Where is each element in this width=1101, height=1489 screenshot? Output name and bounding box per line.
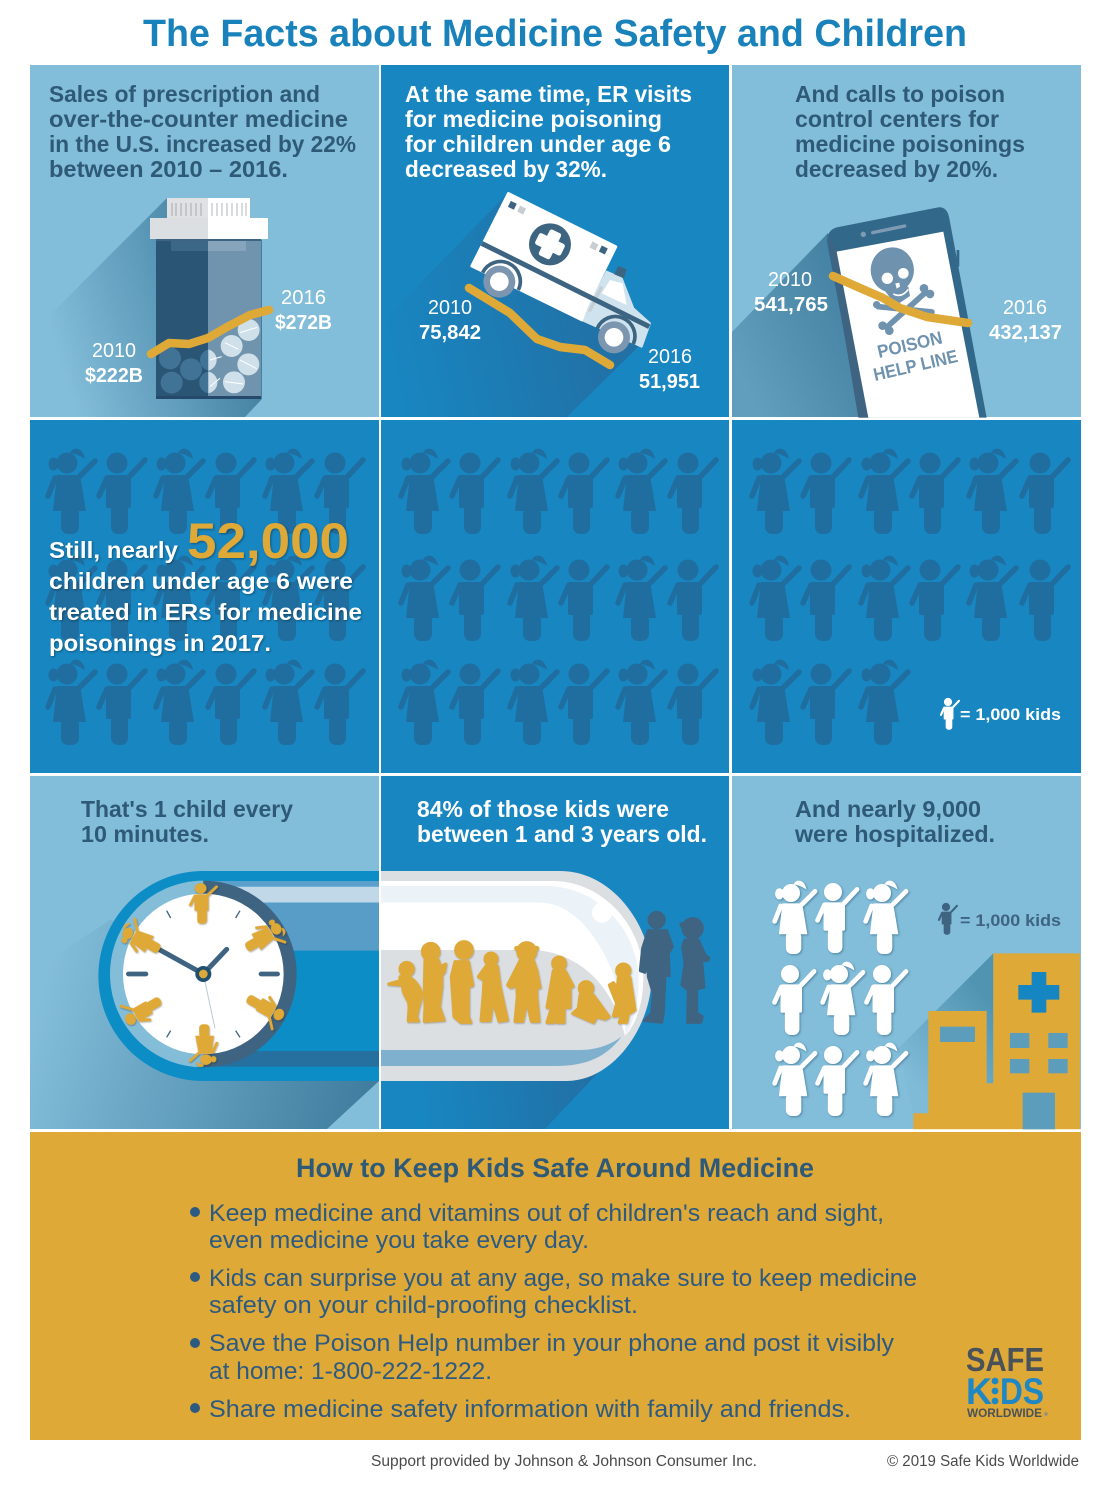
tips heading: How to Keep Kids Safe Around Medicine <box>296 1153 814 1183</box>
panel: medicine sales <box>30 65 379 417</box>
icon: capsule with children <box>381 871 709 1081</box>
legend: one icon equals 1,000 kids <box>941 698 1061 730</box>
age text: between 1 and 3 years old. <box>417 821 707 847</box>
poison text: medicine poisonings <box>795 131 1025 157</box>
icon: phone with skull <box>732 207 987 418</box>
logo: Safe Kids Worldwide: SAFE <box>966 1341 1044 1378</box>
statistic text: children under age 6 were <box>49 568 353 594</box>
hospitalized text <box>794 796 995 847</box>
ER text <box>405 81 692 182</box>
icon: pill bottle <box>50 198 268 417</box>
label 2016 sales: $272B <box>275 311 332 334</box>
panel: kid pictogram left with statistic <box>30 420 379 773</box>
footer copyright: © 2019 Safe Kids Worldwide <box>887 1453 1079 1470</box>
ER text: decreased by 32%. <box>405 156 607 182</box>
label 2016 ER: 2016 <box>648 345 692 368</box>
label 2016 ER <box>639 345 700 393</box>
legend: one icon equals 1,000 kids: = 1,000 kids <box>960 911 1061 930</box>
tip 2: Kids can surprise you at any age, so make sure to keep medicine <box>209 1265 917 1292</box>
icon: ambulance <box>381 193 650 417</box>
sales trend line <box>151 310 269 354</box>
age text <box>417 796 707 847</box>
phone screen label: POISON <box>875 328 944 362</box>
icon: clock in capsule <box>98 871 379 1081</box>
ER text: for medicine poisoning <box>405 106 662 132</box>
logo: Safe Kids Worldwide: K <box>966 1371 992 1412</box>
icon: hospital <box>898 953 1080 1129</box>
gold children silhouettes <box>389 942 635 1022</box>
clock text <box>81 796 293 847</box>
label 2010 poison <box>754 268 828 316</box>
panel: safety tips <box>30 1132 1081 1440</box>
poison text: control centers for <box>795 106 999 132</box>
statistic text: Still, nearly <box>49 537 178 563</box>
tip 1 <box>190 1200 884 1254</box>
sales text: between 2010 – 2016. <box>49 156 288 182</box>
statistic text <box>49 513 362 656</box>
gold kids around clock <box>116 883 290 1067</box>
label 2016 ER: 51,951 <box>639 370 700 393</box>
statistic text: 52,000 <box>187 513 349 569</box>
statistic text: poisonings in 2017. <box>49 630 271 656</box>
ER text: for children under age 6 <box>405 131 671 157</box>
label 2010 poison: 2010 <box>768 268 812 291</box>
dark children silhouettes <box>640 912 709 1022</box>
tip 4: Share medicine safety information with family and friends. <box>209 1396 851 1423</box>
legend: one icon equals 1,000 kids: = 1,000 kids <box>960 705 1061 724</box>
panel: one child every 10 minutes <box>30 776 379 1129</box>
title: The Facts about Medicine Safety and Children <box>143 13 967 55</box>
clock text: 10 minutes. <box>81 821 209 847</box>
hospitalized text: And nearly 9,000 <box>795 796 981 822</box>
label 2016 sales: 2016 <box>281 286 326 309</box>
tip 3 <box>190 1330 894 1385</box>
label 2010 ER <box>419 296 481 344</box>
footer credit: Support provided by Johnson & Johnson Consumer Inc. <box>371 1453 757 1470</box>
poison text: decreased by 20%. <box>795 156 998 182</box>
label 2016 poison <box>989 296 1062 344</box>
panel: kid pictogram right <box>732 420 1081 773</box>
legend: one icon equals 1,000 kids <box>939 903 1061 935</box>
poison trend line <box>833 276 968 323</box>
panel: poison control calls <box>732 65 1081 418</box>
sales text <box>49 81 356 182</box>
pictogram rows <box>48 449 363 745</box>
tip 3: Save the Poison Help number in your phone and post it visibly <box>209 1330 894 1357</box>
ER trend line <box>469 288 610 365</box>
label 2010 sales: 2010 <box>92 339 136 362</box>
tip 2 <box>190 1265 917 1319</box>
sales text: Sales of prescription and <box>49 81 320 107</box>
clock text: That's 1 child every <box>81 796 293 822</box>
shadow of clock capsule <box>30 920 379 1129</box>
hospitalized text: were hospitalized. <box>794 821 995 847</box>
white kid pictogram <box>775 881 906 1116</box>
phone screen label: HELP LINE <box>871 346 960 385</box>
logo: Safe Kids Worldwide <box>966 1341 1048 1420</box>
sales text: in the U.S. increased by 22% <box>49 131 356 157</box>
panel: kid pictogram middle <box>381 420 729 773</box>
label 2010 ER: 75,842 <box>419 321 481 344</box>
phone screen label <box>871 328 960 385</box>
tip 1: Keep medicine and vitamins out of children's reach and sight, <box>209 1200 884 1227</box>
label 2016 poison: 432,137 <box>989 321 1062 344</box>
tip 3: at home: 1-800-222-1222. <box>209 1358 492 1385</box>
age text: 84% of those kids were <box>417 796 669 822</box>
label 2010 sales: $222B <box>85 364 143 387</box>
shadow of capsule <box>381 1060 610 1129</box>
label 2010 poison: 541,765 <box>754 293 828 316</box>
panel: ER visits <box>381 65 729 417</box>
label 2016 poison: 2016 <box>1003 296 1047 319</box>
panel: 84% aged 1 to 3 <box>381 776 729 1129</box>
sales text: over-the-counter medicine <box>49 106 348 132</box>
panel: hospitalized <box>732 776 1081 1129</box>
logo: Safe Kids Worldwide: DS <box>1000 1371 1044 1412</box>
tip 2: safety on your child-proofing checklist. <box>209 1292 638 1319</box>
ER text: At the same time, ER visits <box>405 81 692 107</box>
statistic text: treated in ERs for medicine <box>49 599 362 625</box>
tip 1: even medicine you take every day. <box>209 1227 589 1254</box>
label 2010 sales <box>85 339 143 387</box>
poison text <box>795 81 1025 182</box>
label 2010 ER: 2010 <box>428 296 472 319</box>
label 2016 sales <box>275 286 332 334</box>
logo: Safe Kids Worldwide: WORLDWIDE <box>967 1406 1042 1420</box>
poison text: And calls to poison <box>795 81 1005 107</box>
